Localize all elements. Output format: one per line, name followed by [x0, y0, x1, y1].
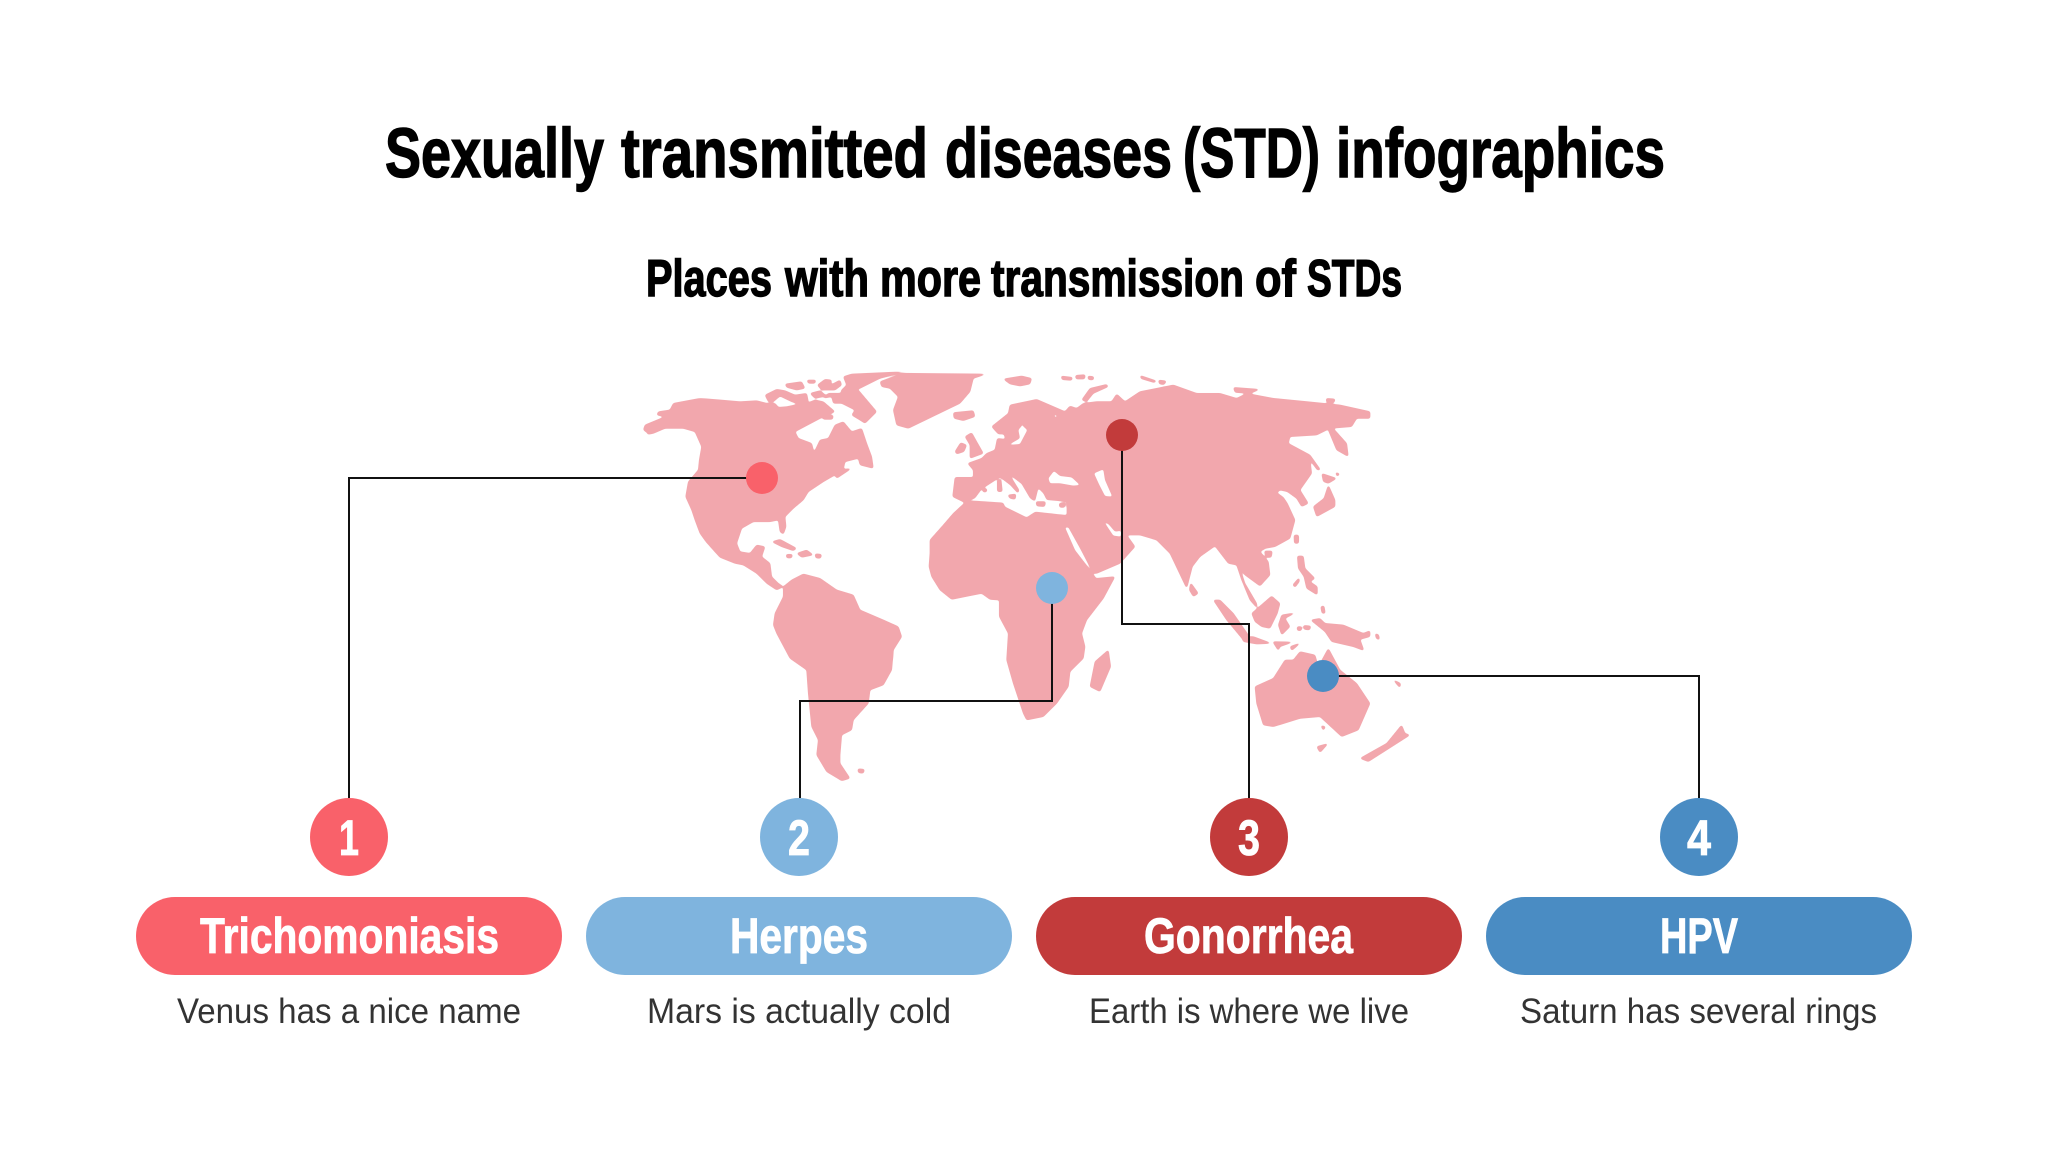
title: (STD): [1183, 114, 1320, 192]
subtitle: Places: [646, 250, 772, 308]
number badge 1: 1: [339, 810, 359, 866]
number badge 4: 4: [1687, 810, 1711, 866]
subtitle: more: [880, 250, 981, 308]
pill: Trichomoniasis: Trichomoniasis: [200, 908, 499, 964]
pill: Herpes: Herpes: [730, 908, 868, 964]
map pin: Australia: [1307, 660, 1339, 692]
number badge 1: [310, 798, 388, 876]
number badge 3: 3: [1238, 810, 1260, 866]
description 1: Venus has a nice name: [177, 992, 521, 1031]
subtitle: transmission: [991, 250, 1244, 308]
title: diseases: [945, 114, 1172, 192]
pill: HPV: HPV: [1660, 908, 1738, 964]
title: Sexually: [385, 114, 604, 192]
map: Africa, Eurasia and Oceania: [929, 375, 1410, 762]
map: Americas: [638, 372, 987, 781]
map pin: Africa: [1036, 572, 1068, 604]
number badge 4: [1660, 798, 1738, 876]
map pin: Russia: [1106, 419, 1138, 451]
subtitle: STDs: [1307, 250, 1402, 308]
item 3: Gonorrhea: [1036, 798, 1462, 1031]
number badge 3: [1210, 798, 1288, 876]
title: [385, 114, 1665, 192]
connector lines: [349, 435, 1699, 798]
description 2: Mars is actually cold: [647, 992, 951, 1031]
pill: Gonorrhea: [1036, 897, 1462, 975]
item 4: HPV: [1486, 798, 1912, 1031]
number badge 2: [760, 798, 838, 876]
subtitle: of: [1255, 250, 1297, 308]
title: transmitted: [621, 114, 928, 192]
description 3: Earth is where we live: [1089, 992, 1409, 1031]
item 1: Trichomoniasis: [136, 798, 562, 1031]
pill: Gonorrhea: Gonorrhea: [1144, 908, 1354, 964]
description 4: Saturn has several rings: [1520, 992, 1877, 1031]
pill: Herpes: [586, 897, 1012, 975]
pill: HPV: [1486, 897, 1912, 975]
pill: Trichomoniasis: [136, 897, 562, 975]
number badge 2: 2: [788, 810, 810, 866]
subtitle: [646, 250, 1402, 308]
map pin: North America: [746, 462, 778, 494]
item 2: Herpes: [586, 798, 1012, 1031]
title: infographics: [1336, 114, 1665, 192]
world map: [638, 372, 1410, 781]
subtitle: with: [784, 250, 869, 308]
